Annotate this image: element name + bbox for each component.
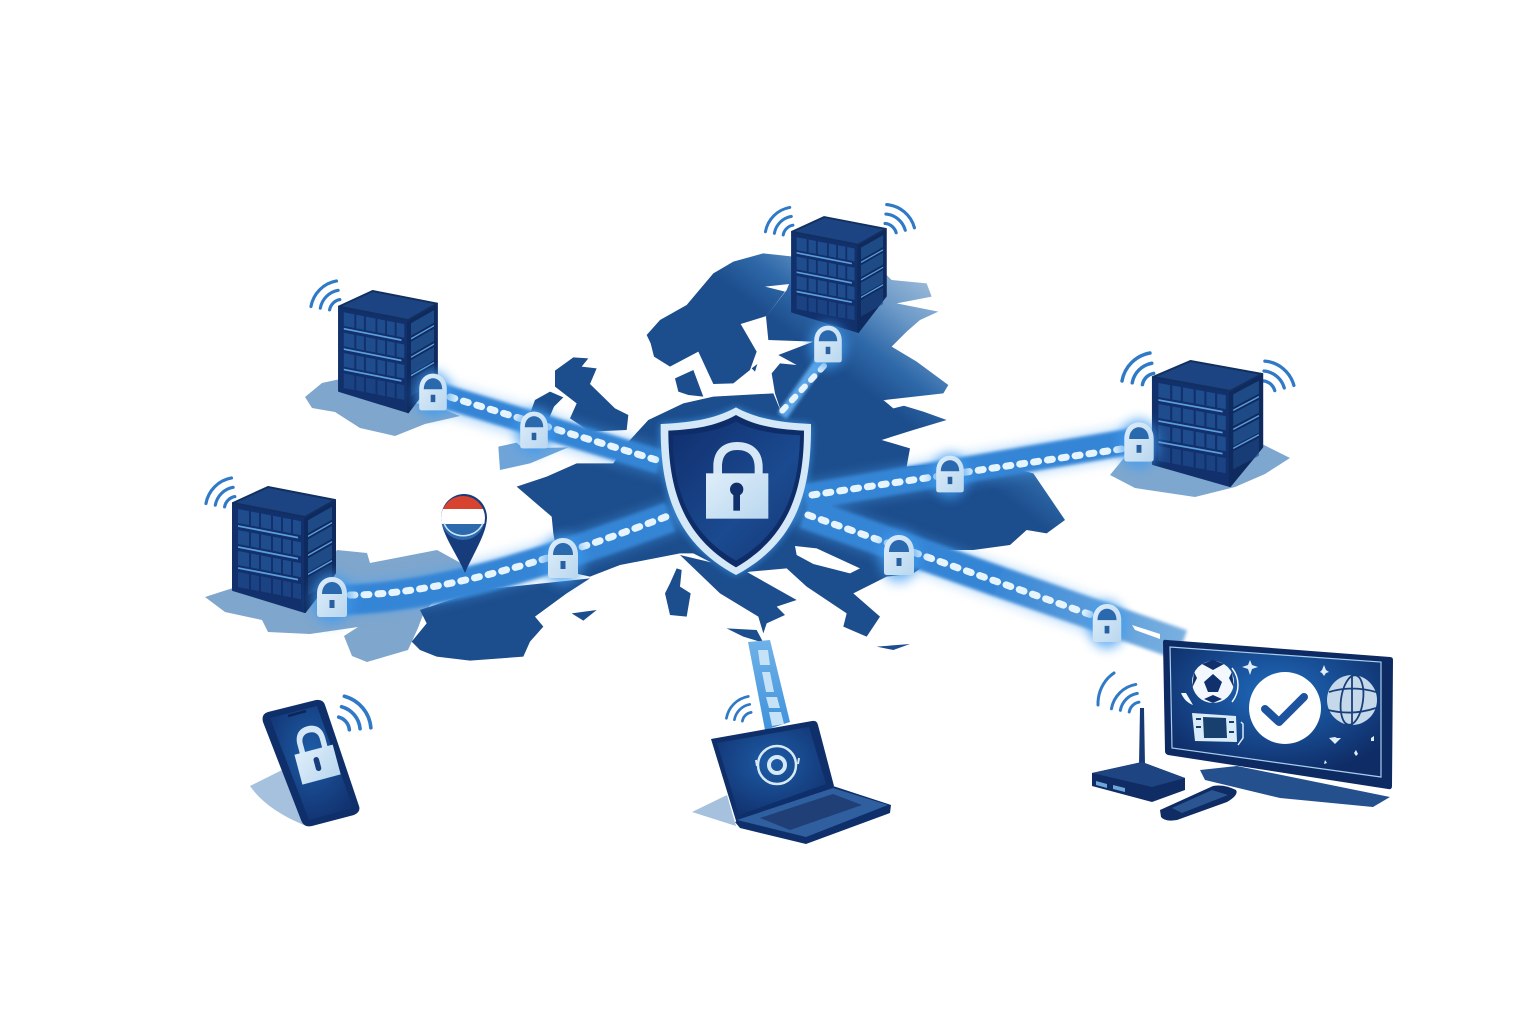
signal waves [202, 474, 242, 514]
map: mainland [517, 273, 1065, 637]
map: Iberia [412, 578, 590, 661]
phone signal waves [331, 692, 376, 739]
laptop base [735, 786, 891, 844]
map: pale region under east server [1110, 440, 1290, 497]
map: Scandinavia [647, 253, 795, 384]
phone padlock [288, 721, 341, 785]
map: pale region under west server [205, 550, 466, 662]
globe icon [1327, 674, 1377, 726]
phone speaker [288, 711, 306, 716]
server: west [202, 474, 335, 612]
map: continental Europe landmass [412, 253, 1065, 661]
sparkles [1242, 660, 1374, 764]
shield glow [661, 407, 811, 575]
server tower [792, 217, 886, 332]
map: Sicily [727, 628, 763, 643]
signal waves right [1254, 357, 1298, 398]
phone body [263, 700, 359, 826]
map: Denmark [675, 370, 703, 397]
tunnel to laptop [748, 640, 790, 730]
TV stand [1200, 766, 1390, 807]
server: east [1118, 349, 1298, 486]
laptop screen [717, 727, 826, 815]
server tower [233, 487, 335, 612]
map: Italy [680, 555, 797, 633]
padlock: north server [810, 323, 846, 369]
padlock: east server [1119, 419, 1159, 468]
map: Great Britain [555, 357, 628, 432]
router signal waves [1098, 673, 1146, 719]
padlock [706, 442, 768, 519]
padlock: west server [312, 574, 352, 624]
padlock: screen link [1088, 601, 1126, 649]
padlock: south-east link [879, 532, 919, 582]
TV screen [1170, 647, 1381, 777]
phone shadow [250, 770, 306, 826]
server tower [1153, 361, 1262, 486]
server tower [339, 291, 437, 412]
padlock: France link [543, 535, 583, 585]
padlock: east link [932, 453, 968, 499]
tunnel bands [332, 350, 1182, 645]
map: pale region under north-west server [305, 378, 460, 436]
laptop signal waves [723, 693, 758, 728]
map: Balearic islands [572, 610, 597, 621]
laptop [692, 693, 891, 844]
signal waves right [877, 200, 918, 240]
map: inland sea [795, 546, 860, 573]
router [1092, 708, 1185, 802]
laptop keyboard [760, 794, 862, 830]
shield outer [668, 415, 804, 567]
film strip icon [1192, 713, 1243, 745]
tunnel glow [332, 395, 1140, 618]
server: north-west [307, 277, 437, 412]
shield inner [673, 422, 800, 561]
signal waves left [762, 204, 800, 242]
laptop tunnel data blocks [758, 650, 784, 726]
map: pale Ireland coast [498, 443, 568, 470]
tunnel padlocks [312, 323, 1159, 649]
TV frame [1163, 640, 1393, 789]
check badge [1249, 672, 1321, 744]
shield rim [661, 407, 811, 575]
laptop shadow [692, 795, 736, 826]
football icon [1181, 660, 1238, 705]
encrypted tunnels [332, 350, 1182, 730]
padlock: north-west server [415, 371, 451, 417]
check mark [1265, 697, 1304, 722]
padlock: British link [516, 409, 552, 455]
map: Corsica and Sardinia [665, 568, 691, 617]
tunnel end near screen [1132, 625, 1160, 639]
remote control [1160, 786, 1237, 821]
laptop lid [711, 721, 834, 824]
laptop screen icon [756, 746, 799, 784]
location pin with Dutch flag [440, 494, 487, 573]
smart TV with router and remote [1092, 640, 1393, 821]
map of Europe [205, 253, 1290, 662]
phone screen [270, 706, 353, 820]
smartphone [250, 692, 376, 826]
signal waves left [1118, 349, 1162, 393]
map: Ireland [530, 392, 563, 420]
map: Gotland [752, 364, 757, 372]
map: Finnish gulf highlight [883, 400, 913, 408]
lock dots on tunnels [350, 366, 1128, 618]
server: north [762, 200, 918, 332]
map: Crete [877, 644, 910, 650]
signal waves [307, 277, 347, 317]
central shield with padlock [661, 407, 811, 575]
